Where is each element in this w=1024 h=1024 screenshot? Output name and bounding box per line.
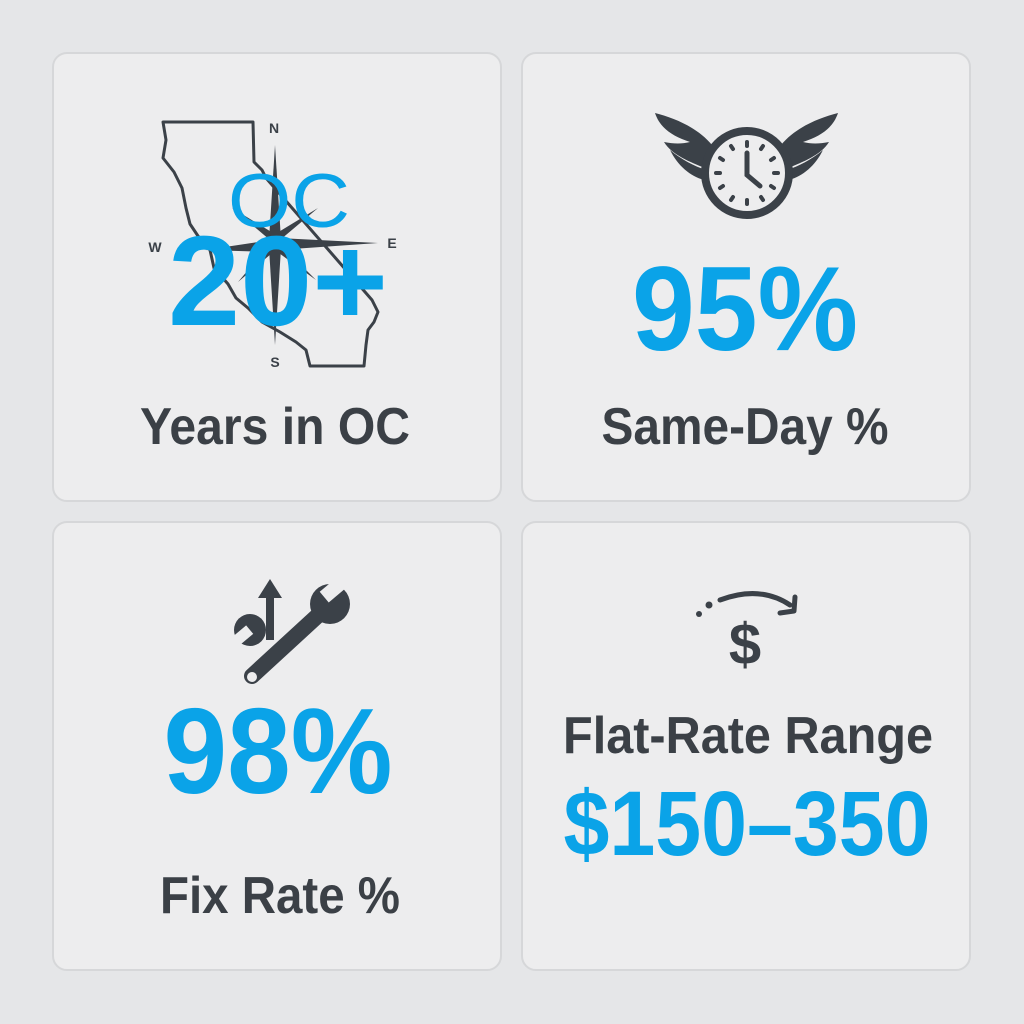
icon: California map with compass xyxy=(148,120,397,370)
label: Years in OC: Years in OC xyxy=(140,398,410,456)
panel: same-day xyxy=(522,53,970,501)
stat: 20+: 20+ xyxy=(168,210,388,353)
icon: dollar with arrow: $ xyxy=(729,612,761,677)
icon: wrench with arrow xyxy=(228,576,350,682)
icon: California map with compass: N xyxy=(269,120,279,136)
label: Same-Day %: Same-Day % xyxy=(602,398,888,456)
label: Flat-Rate Range: Flat-Rate Range xyxy=(563,707,933,765)
label: Fix Rate %: Fix Rate % xyxy=(160,867,400,925)
icon: winged clock xyxy=(655,113,838,215)
panel: fix rate xyxy=(53,522,501,970)
stat: 95%: 95% xyxy=(632,242,858,376)
icon: California map with compass: W xyxy=(148,239,162,255)
icon: California map with compass: S xyxy=(270,354,280,370)
panel: flat-rate range xyxy=(522,522,970,970)
stat: 98%: 98% xyxy=(164,683,392,819)
text: OC: OC xyxy=(228,159,350,244)
panel: years in OC xyxy=(53,53,501,501)
icon: California map with compass: E xyxy=(387,235,397,251)
icon: dollar with arrow xyxy=(696,594,795,677)
stat: $150–350: $150–350 xyxy=(564,773,930,875)
